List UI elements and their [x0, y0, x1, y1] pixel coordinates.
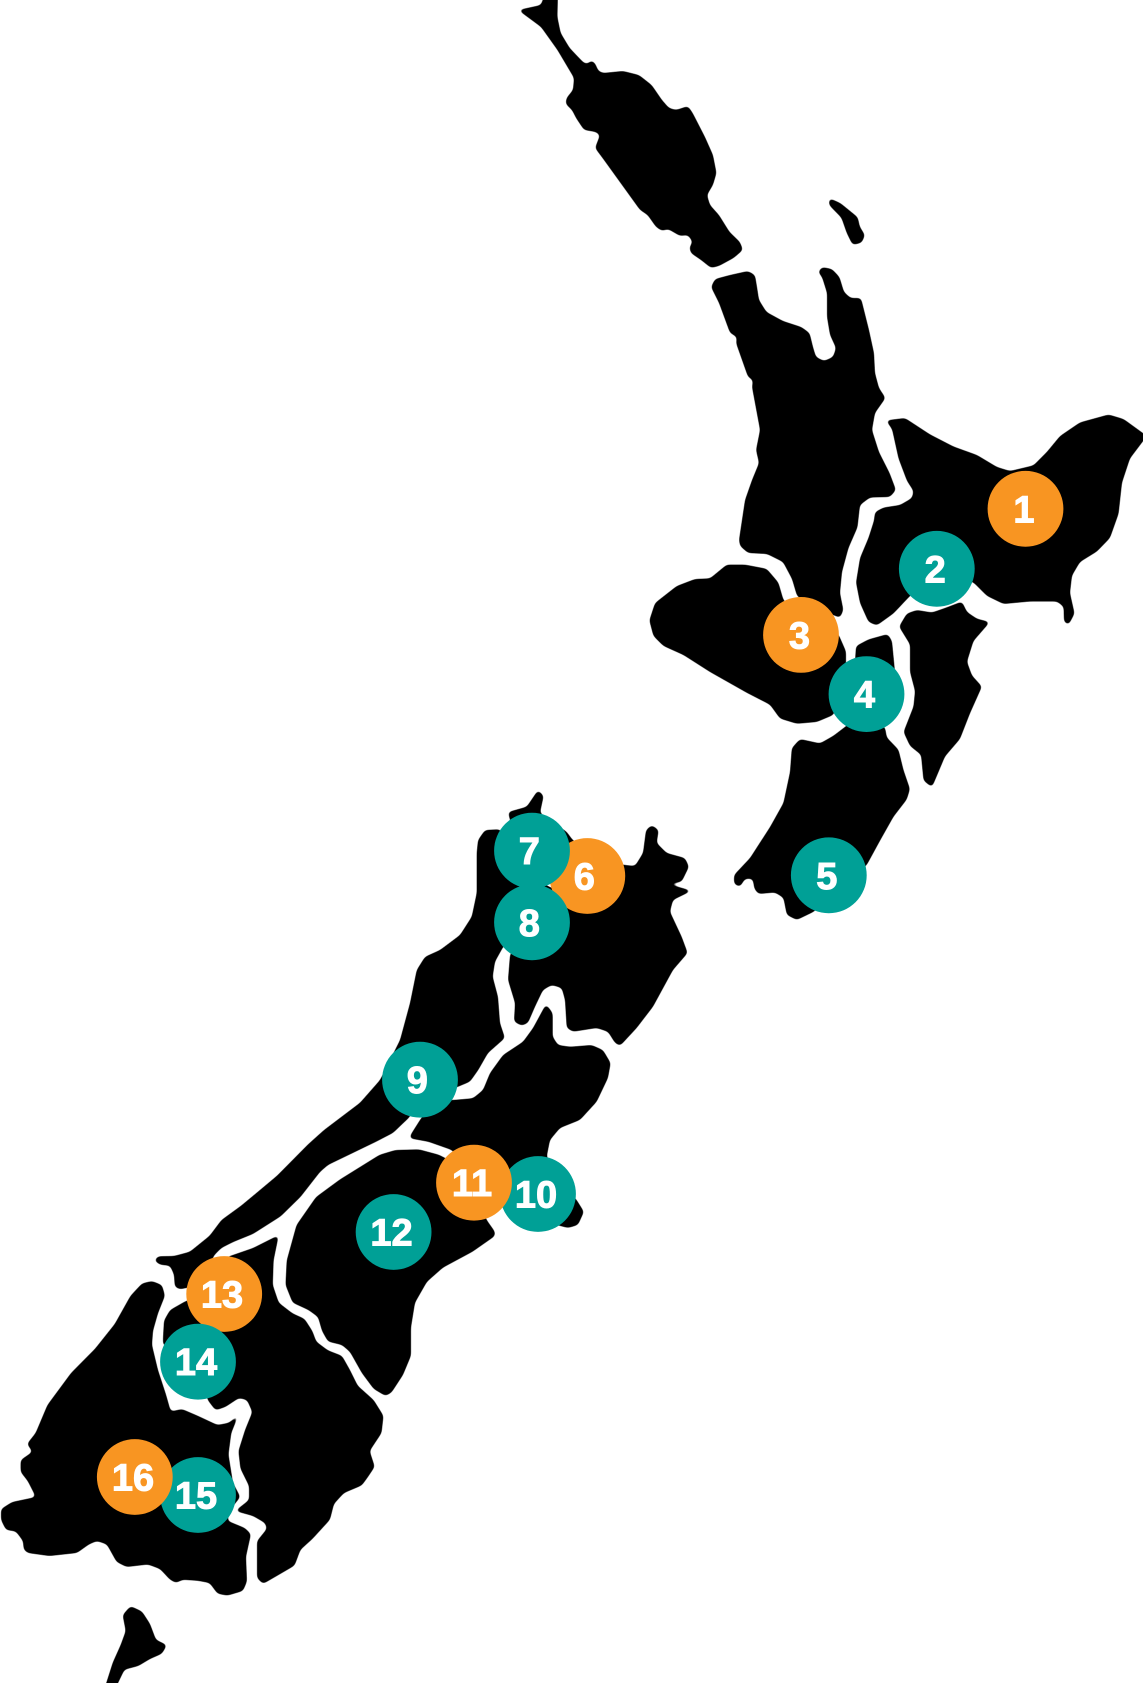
marker 15 [160, 1457, 236, 1533]
region: Canterbury central [286, 1149, 495, 1396]
region: Fiordland and Southland [1, 1281, 251, 1596]
marker 5 [791, 837, 867, 913]
marker 6: 6 [574, 856, 595, 898]
region: Taranaki and Manawatu [649, 565, 846, 724]
marker 7: 7 [519, 831, 540, 873]
marker 10: 10 [515, 1174, 557, 1216]
marker 4: 4 [854, 675, 875, 717]
region: Great Barrier Island [829, 198, 865, 245]
marker 14 [160, 1324, 236, 1400]
marker 11: 11 [452, 1163, 492, 1205]
marker 7 [494, 813, 570, 889]
marker 4 [829, 656, 904, 732]
marker 10 [500, 1156, 576, 1232]
region: Bay of Plenty and Gisborne [856, 414, 1143, 626]
marker 8 [494, 884, 570, 960]
region: Hawke's Bay [899, 602, 990, 787]
marker 3: 3 [789, 615, 810, 657]
marker 8: 8 [519, 903, 540, 945]
region: Auckland and Waikato [711, 267, 896, 618]
marker 16: 16 [112, 1458, 154, 1500]
region: central block [855, 634, 895, 695]
marker 13: 13 [201, 1274, 243, 1316]
marker 16 [97, 1439, 173, 1515]
marker 9 [382, 1042, 458, 1118]
region: Otago [163, 1235, 384, 1584]
marker 11 [436, 1145, 512, 1221]
region: West Coast [154, 829, 520, 1289]
region: Nelson and Marlborough [508, 790, 692, 1046]
region: Canterbury north [409, 1004, 611, 1228]
region: Stewart Island [104, 1606, 167, 1683]
marker 2: 2 [925, 549, 946, 591]
marker 12: 12 [370, 1212, 413, 1254]
marker 9: 9 [407, 1060, 428, 1102]
region: Wellington and Wairarapa [734, 715, 910, 920]
marker 3 [763, 597, 839, 673]
marker 5: 5 [816, 856, 837, 898]
marker 2 [899, 531, 975, 607]
marker 1: 1 [1013, 489, 1035, 531]
marker 12 [356, 1194, 432, 1270]
marker 1 [988, 471, 1063, 547]
region: Northland [518, 0, 743, 268]
marker 14: 14 [175, 1342, 217, 1384]
marker 15: 15 [175, 1476, 217, 1518]
marker 13 [186, 1256, 262, 1332]
marker 6 [549, 838, 625, 914]
